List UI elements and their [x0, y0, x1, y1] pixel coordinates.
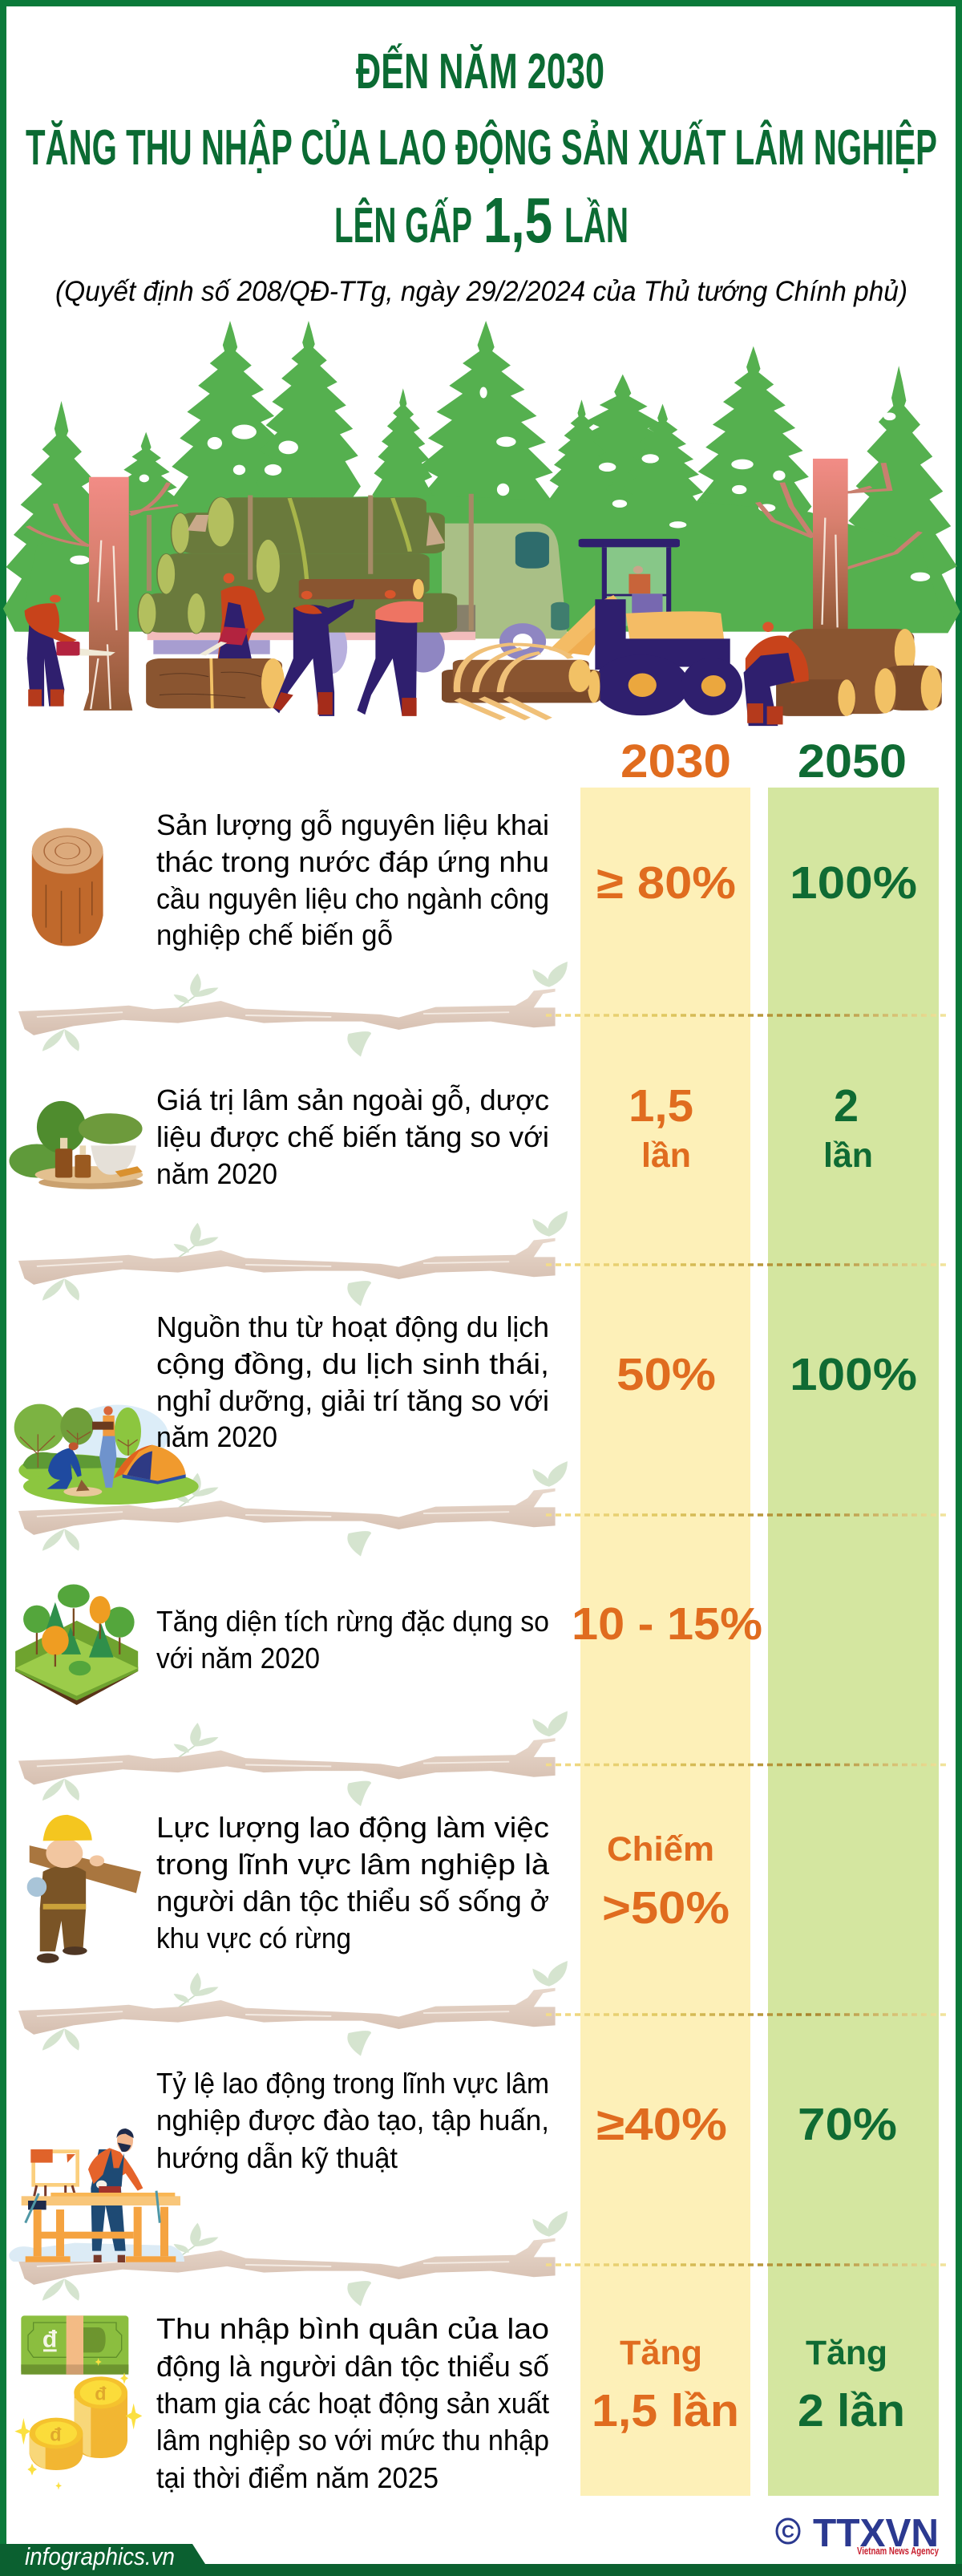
icon: banknotes and coins: đ [50, 2424, 62, 2444]
text: ecotourism [156, 1310, 549, 1453]
logo: TTXVN: C [782, 2521, 794, 2542]
text: non-timber products: năm 2020 [156, 1157, 277, 1190]
text: ethnic minority labour: người dân tộc thiểu số sống ở [156, 1885, 549, 1918]
subtitle: (Quyết định số 208/QĐ-TTg, ngày 29/2/2024 của Thủ tướng Chính phủ) [55, 276, 907, 307]
row 4: special-use forest [15, 1585, 762, 1705]
wheel loader [549, 539, 742, 715]
text: ecotourism: nghỉ dưỡng, giải trí tăng so với [156, 1384, 549, 1417]
value 2030: 10 to 15%: 10 - 15% [572, 1598, 762, 1650]
icon: campers and tent [14, 1404, 199, 1505]
text: ethnic minority labour: trong lĩnh vực lâm nghiệp là [156, 1848, 550, 1881]
footer band [0, 2544, 962, 2576]
row 7: income [14, 2312, 905, 2494]
text: trained labour: nghiệp được đào tạo, tập huấn, [156, 2104, 549, 2137]
value 2050: 100%: 100% [790, 1349, 917, 1400]
text: income: động là người dân tộc thiểu số [156, 2350, 549, 2383]
text: income: tham gia các hoạt động sản xuất [156, 2387, 549, 2420]
text: ecotourism: cộng đồng, du lịch sinh thái, [156, 1347, 549, 1380]
value 2030: at least 40%: ≥40% [596, 2099, 727, 2150]
text: trained labour: hướng dẫn kỹ thuật [156, 2141, 398, 2174]
text: ecotourism: năm 2020 [156, 1420, 277, 1453]
text: special-use forest: với năm 2020 [156, 1642, 320, 1675]
text: trained labour: Tỷ lệ lao động trong lĩnh vực lâm [156, 2067, 549, 2100]
worker carrying log, left [273, 591, 354, 716]
logs held by the loader [442, 644, 600, 719]
column heading: 2050: 2050 [798, 735, 907, 788]
text: income [156, 2312, 549, 2494]
title: 1,5 [483, 184, 552, 256]
text: wood supply: Sản lượng gỗ nguyên liệu khai [156, 808, 549, 841]
text: wood supply [156, 808, 549, 951]
column: 2050 [768, 788, 939, 2496]
icon: herbs and oil bottles [9, 1101, 143, 1189]
row 3: ecotourism [14, 1310, 917, 1505]
value 2050: 2 times: 2 [834, 1080, 859, 1132]
value 2050: increase 2 times: Tăng [806, 2334, 887, 2372]
value 2030: 1.5 times: lần [641, 1136, 691, 1175]
value 2030: 1.5 times [629, 1080, 693, 1175]
icon: tree stump [32, 828, 103, 946]
log stack right [776, 629, 942, 716]
icon: banknotes and coins: đ [95, 2384, 107, 2404]
text: ethnic minority labour: khu vực có rừng [156, 1922, 351, 1954]
column: 2030 [580, 788, 750, 2496]
value 2030: increase 1.5 times [592, 2334, 739, 2436]
icon: banknotes and coins [14, 2315, 142, 2490]
value 2050: increase 2 times: 2 lần [798, 2385, 905, 2436]
text: ecotourism: Nguồn thu từ hoạt động du lịch [156, 1310, 549, 1343]
worker standing on log [200, 573, 265, 658]
right tree [758, 459, 920, 633]
value 2030: 1.5 times: 1,5 [629, 1080, 693, 1132]
row 1: wood supply [32, 808, 917, 951]
value 2050: increase 2 times [798, 2334, 905, 2436]
value 2030: at least 80%: ≥ 80% [596, 857, 736, 909]
text: income: Thu nhập bình quân của lao [156, 2312, 549, 2345]
value 2050: 70%: 70% [798, 2099, 897, 2150]
text: non-timber products: Giá trị lâm sản ngoài gỗ, dược [156, 1083, 549, 1116]
text: wood supply: nghiệp chế biến gỗ [156, 918, 393, 951]
value 2050: 2 times [823, 1080, 873, 1175]
left felled tree [27, 477, 178, 711]
value 2050: 100%: 100% [790, 857, 917, 909]
value 2030: 50%: 50% [616, 1349, 716, 1400]
illustration: forest and logging scene [3, 321, 960, 726]
worker with chainsaw at tree [25, 595, 115, 707]
branch dividers [18, 962, 948, 2307]
title: ĐẾN NĂM 2030 [356, 44, 604, 99]
seated worker [744, 622, 809, 726]
row 5: ethnic minority labour [27, 1811, 730, 1963]
text: wood supply: thác trong nước đáp ứng nhu [156, 845, 549, 878]
logging truck [138, 494, 569, 674]
icon: isometric forest block [15, 1585, 138, 1705]
row 6: trained labour [9, 2067, 897, 2262]
icon: carpenter at workbench [9, 2128, 184, 2262]
worker carrying log, right [357, 590, 423, 716]
column heading: 2030: 2030 [620, 735, 731, 788]
text: wood supply: cầu nguyên liệu cho ngành công [156, 882, 549, 915]
front log [146, 658, 285, 708]
text: special-use forest [156, 1605, 549, 1675]
value 2030: increase 1.5 times: 1,5 lần [592, 2385, 739, 2436]
value 2030: over 50%: Chiếm [607, 1830, 714, 1869]
icon: worker with plank [27, 1815, 141, 1963]
title [26, 44, 937, 256]
footer site name: infographics.vn [25, 2542, 175, 2570]
text: income: tại thời điểm năm 2025 [156, 2461, 439, 2494]
forest silhouette [3, 321, 960, 633]
row 2: non-timber products [9, 1080, 873, 1190]
carried log [299, 579, 424, 599]
title: LẦN [564, 198, 629, 253]
text: non-timber products [156, 1083, 549, 1190]
value 2030: increase 1.5 times: Tăng [620, 2334, 702, 2372]
title: LÊN GẤP [334, 198, 472, 253]
text: trained labour [156, 2067, 549, 2174]
text: ethnic minority labour [156, 1811, 550, 1954]
text: non-timber products: liệu được chế biến tăng so với [156, 1120, 549, 1153]
icon: banknotes and coins: đ [42, 2327, 58, 2353]
text: income: lâm nghiệp so với mức thu nhập [156, 2424, 549, 2457]
value 2030: over 50%: >50% [602, 1882, 730, 1934]
text: ethnic minority labour: Lực lượng lao động làm việc [156, 1811, 549, 1844]
value 2030: over 50% [602, 1830, 730, 1934]
text: special-use forest: Tăng diện tích rừng đặc dụng so [156, 1605, 549, 1638]
value 2050: 2 times: lần [823, 1136, 873, 1175]
logo: TTXVN: TTXVN [813, 2512, 939, 2555]
